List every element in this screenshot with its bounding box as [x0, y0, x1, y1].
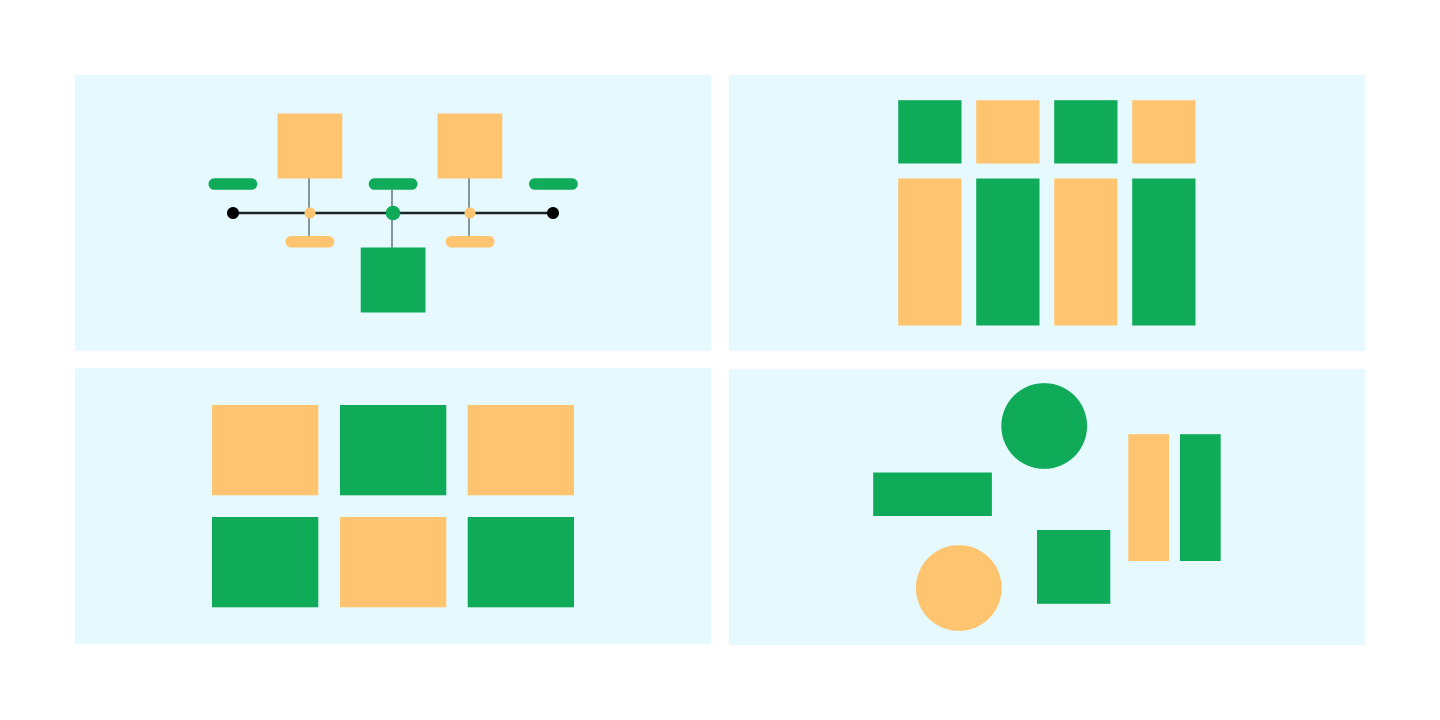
connector stems — [309, 178, 469, 248]
orange block right — [438, 114, 502, 178]
orange circle — [916, 545, 1002, 631]
tall column 1 — [898, 178, 962, 326]
green tall bar — [1180, 434, 1221, 561]
top tile 3 — [1054, 100, 1118, 164]
orange pill left — [286, 236, 334, 248]
tall column 3 — [1054, 178, 1118, 326]
panel: column grid — [729, 75, 1365, 351]
green pill right — [529, 178, 578, 190]
timeline end point left — [227, 207, 239, 219]
green circle — [1001, 383, 1087, 469]
tile top left — [212, 405, 318, 495]
top tile 4 — [1132, 100, 1196, 164]
green pill left — [208, 178, 257, 190]
tile bottom center — [340, 517, 446, 607]
tall column 4 — [1132, 178, 1196, 326]
tile top center — [340, 405, 446, 495]
orange block left — [278, 114, 342, 178]
timeline node green center — [386, 206, 400, 220]
green pill center — [369, 178, 418, 190]
green block center — [361, 248, 426, 312]
timeline node orange right — [464, 208, 476, 218]
green square — [1037, 530, 1110, 604]
top tile 1 — [898, 100, 962, 164]
tile bottom left — [212, 517, 318, 607]
timeline end point right — [547, 207, 559, 219]
panel: six-tile grid — [75, 368, 711, 644]
timeline axis — [233, 212, 553, 214]
top tile 2 — [976, 100, 1040, 164]
tile top right — [468, 405, 574, 495]
orange tall bar — [1128, 434, 1169, 561]
timeline node orange left — [304, 208, 316, 218]
panel: timeline — [75, 75, 711, 351]
orange pill right — [446, 236, 494, 248]
tall column 2 — [976, 178, 1040, 326]
green wide rectangle — [873, 472, 992, 516]
panel: scattered shapes — [729, 369, 1365, 645]
tile bottom right — [468, 517, 574, 607]
